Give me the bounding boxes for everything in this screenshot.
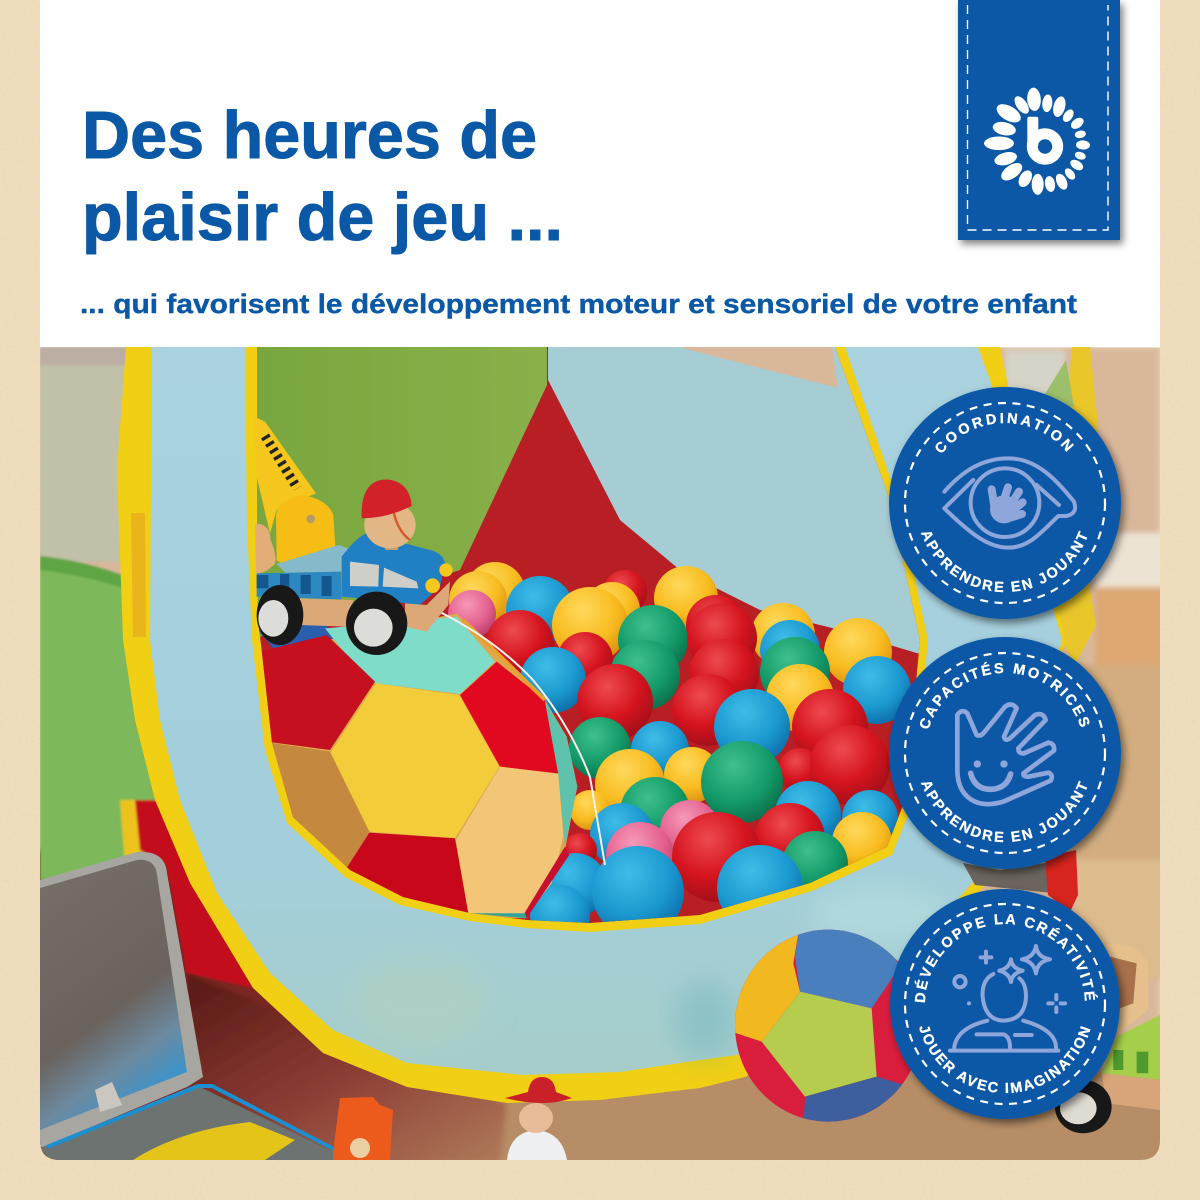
room background	[30, 347, 1170, 1170]
badge text bottom: APPRENDRE EN JOUANT	[920, 530, 1088, 592]
metal piece and red tent edge behind badge	[963, 850, 1078, 912]
title: plaisir de jeu ...	[82, 180, 563, 255]
truck bed	[277, 545, 348, 574]
icon: meditating figure with stars	[950, 946, 1065, 1051]
subtitle: ... qui favorisent le développement moteur et sensoriel de votre enfant	[80, 289, 1077, 319]
photo: tent with ball pit	[30, 347, 1170, 1170]
orange wooden toy	[333, 1097, 393, 1160]
white header panel	[40, 0, 1160, 348]
badge: motor skills	[887, 636, 1130, 877]
title: Des heures de	[82, 98, 537, 173]
wooden chassis	[300, 598, 353, 627]
left exterior tent panels	[40, 347, 253, 988]
blue fabric	[150, 347, 1062, 1075]
crane arm	[254, 417, 316, 533]
badge text top: DÉVELOPPE LA CRÉATIVITÉ	[914, 914, 1098, 1002]
big soccer ball	[253, 613, 577, 918]
cab	[342, 533, 445, 605]
wheels	[257, 585, 303, 645]
tent back yellow strips	[1058, 347, 1098, 662]
tent front frame	[117, 347, 1065, 1103]
crane housing	[276, 495, 336, 569]
icon: sunflower logo	[984, 87, 1090, 195]
yellow trim	[117, 347, 1065, 1103]
wooden hook	[255, 523, 276, 573]
metal box	[40, 852, 353, 1160]
logo tag	[958, 0, 1120, 240]
icon: smiling hand	[957, 705, 1054, 804]
wooden toy under badge	[1055, 944, 1160, 1133]
badge text top: COORDINATION	[936, 412, 1074, 452]
badge text top: CAPACITÉS MOTRICES	[920, 662, 1090, 728]
fabric shading	[350, 887, 950, 1060]
badge text bottom: JOUER AVEC IMAGINATION	[920, 1026, 1090, 1094]
icon: eye with hand	[944, 458, 1075, 548]
opening yellow edge	[245, 347, 928, 932]
title	[82, 98, 563, 255]
small soccer ball	[734, 930, 911, 1122]
string	[440, 612, 605, 865]
balls	[448, 562, 911, 945]
driver	[385, 547, 398, 550]
darker yellow seam	[131, 513, 146, 637]
badge text bottom: APPRENDRE EN JOUANT	[920, 780, 1088, 842]
toy crane truck	[254, 417, 453, 655]
ball pit	[250, 347, 940, 947]
badge: coordination	[886, 386, 1130, 628]
badge: creativity	[888, 888, 1128, 1128]
small wooden figure	[505, 1077, 572, 1160]
